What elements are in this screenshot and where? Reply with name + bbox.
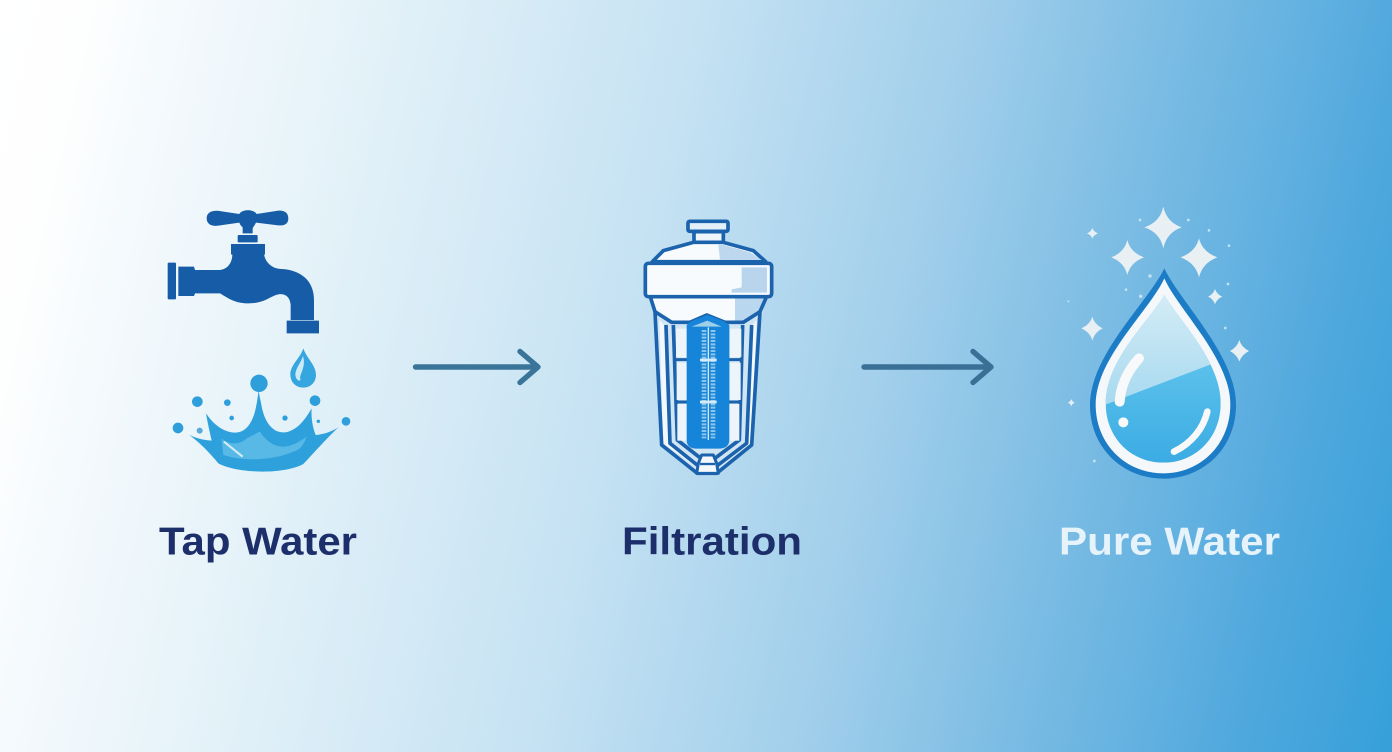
- icon: pure water drop: [1090, 268, 1236, 479]
- arrow: filtration to pure water: [864, 352, 991, 382]
- label: Filtration: Filtration: [622, 520, 802, 564]
- label: Pure Water: Pure Water: [1059, 520, 1280, 564]
- label: Tap Water: Tap Water: [159, 520, 357, 564]
- process diagram: [159, 206, 1280, 562]
- icon: faucet: [168, 210, 319, 333]
- icon: sparkles: [1067, 207, 1249, 462]
- cartridge body: [651, 298, 766, 473]
- icon: water splash with falling drop: [173, 348, 350, 472]
- cartridge cap: [645, 221, 772, 297]
- step 2: filtration: [622, 221, 802, 564]
- inner blue core: [687, 315, 729, 449]
- bottom outlet: [697, 455, 718, 473]
- icon: water filter cartridge: [645, 221, 772, 473]
- drop highlights: [1120, 358, 1207, 452]
- filter media: [676, 329, 741, 441]
- step 1: tap water: [159, 210, 357, 563]
- arrow: tap water to filtration: [416, 352, 538, 382]
- step 3: pure water: [1059, 207, 1280, 563]
